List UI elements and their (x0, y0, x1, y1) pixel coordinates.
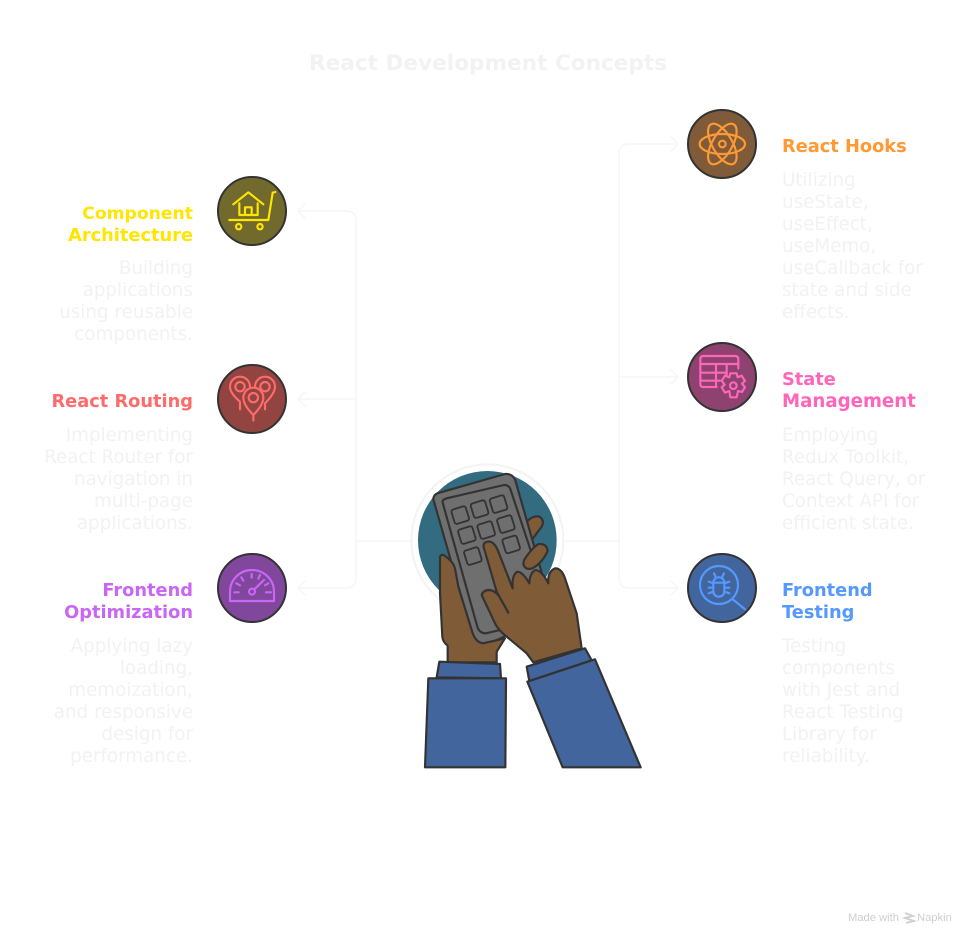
icon: table and gear (688, 343, 756, 411)
heading: Testing (782, 602, 854, 623)
description: navigation in (74, 469, 193, 490)
description: applications (83, 280, 193, 301)
right hand (482, 542, 582, 662)
description: Library for (782, 724, 877, 745)
right sleeve (527, 648, 641, 767)
description: components. (74, 324, 193, 345)
description: applications. (77, 513, 193, 534)
description: memoization, (68, 680, 193, 701)
description: Employing (782, 425, 878, 446)
connectors: left (298, 204, 412, 595)
icon: map pins (218, 365, 286, 433)
attribution: Made with Napkin: Made with (848, 912, 899, 924)
description: state and side (782, 280, 912, 301)
description: Implementing (66, 425, 193, 446)
description: multi-page (94, 491, 193, 512)
heading: React Hooks (782, 136, 907, 157)
description: Redux Toolkit, (782, 447, 909, 468)
heading: Frontend (102, 580, 193, 601)
description: effects. (782, 302, 850, 323)
finger behind phone (527, 516, 543, 540)
description: useMemo, (782, 236, 876, 257)
central illustration: hands holding phone (411, 464, 641, 767)
description: with Jest and (782, 680, 900, 701)
description: performance. (70, 746, 193, 767)
item: React Hooks (688, 110, 923, 323)
description: Building (119, 258, 193, 279)
item: React Routing (44, 365, 286, 534)
description: loading, (120, 658, 193, 679)
icon: atom (688, 110, 756, 178)
title: React Development Concepts (309, 51, 667, 76)
description: components (782, 658, 895, 679)
item: Frontend Optimization (54, 554, 286, 767)
item: Frontend Testing (688, 554, 904, 767)
description: and responsive (54, 702, 193, 723)
description: Testing (781, 636, 846, 657)
description: Utilizing (782, 170, 856, 191)
description: Context API for (782, 491, 920, 512)
attribution: Made with Napkin (848, 912, 952, 924)
description: design for (101, 724, 193, 745)
heading: Component (82, 204, 193, 224)
left sleeve (425, 662, 506, 767)
heading: React Routing (51, 391, 193, 412)
description: Applying lazy (71, 636, 193, 657)
heading: Optimization (64, 602, 193, 623)
icon: gauge (218, 554, 286, 622)
icon: house cart (218, 177, 286, 245)
finger over phone (523, 544, 548, 569)
description: reliability. (782, 746, 870, 767)
icon: bug under magnifier (688, 554, 756, 622)
heading: State (782, 369, 836, 390)
heading: Architecture (68, 225, 193, 246)
description: React Testing (782, 702, 904, 723)
item: Component Architecture (59, 177, 286, 345)
attribution: Made with Napkin: Napkin (917, 912, 952, 924)
background circle (411, 464, 563, 616)
description: React Query, or (782, 469, 926, 490)
description: useCallback for (782, 258, 923, 279)
item: State Management (688, 343, 926, 534)
phone (433, 474, 547, 643)
connectors: right (563, 137, 678, 595)
description: useState, (782, 192, 869, 213)
heading: Management (782, 391, 916, 412)
description: React Router for (44, 447, 193, 468)
description: efficient state. (782, 513, 914, 534)
left hand (440, 555, 505, 662)
description: useEffect, (782, 214, 873, 235)
heading: Frontend (782, 580, 873, 601)
description: using reusable (59, 302, 193, 323)
